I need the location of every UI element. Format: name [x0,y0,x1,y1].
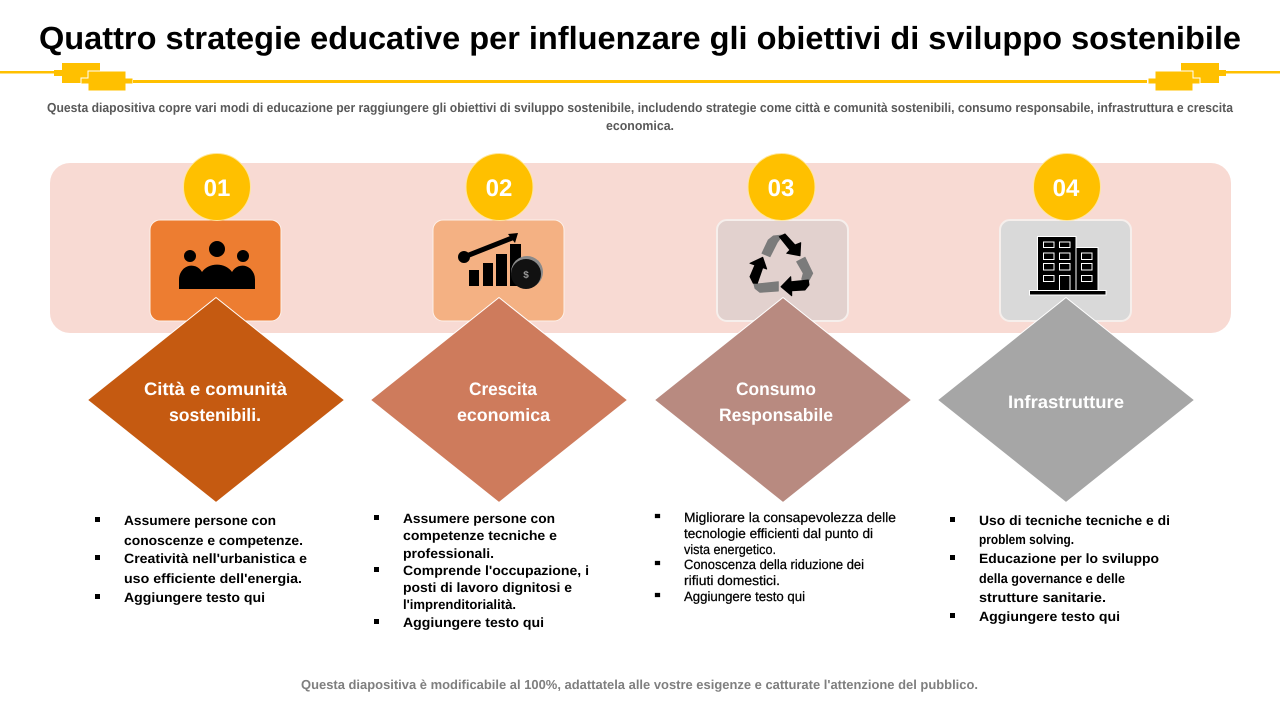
title underline connector [0,63,1280,91]
bullet list 01 [95,513,308,605]
icon box 03 [717,220,848,321]
bullet list 03: Migliorare la consapevolezza delle [684,510,896,525]
icon: growth chart and coin [458,233,543,289]
subtitle: Questa diapositiva copre vari modi di educazione per raggiungere gli obiettivi di sviluppo sostenibile, includendo strategie come città e comunità sostenibili, consumo responsabile, infrastruttura e crescita [47,100,1234,115]
bullet list 02 [374,511,589,630]
number badge 03: 03 [768,175,794,202]
number badge 04: 04 [1053,175,1080,202]
bullet list 02: professionali. [403,546,494,561]
icon box 04 [1000,220,1131,321]
diamond 03: Responsabile [719,405,833,425]
diamond 01 [88,298,344,502]
bullet list 04 [950,513,1170,624]
bullet list 02: l'imprenditorialità. [403,597,516,612]
bullet list 03 [655,510,896,604]
diamond 02: Crescita [469,379,538,399]
diamond 01: sostenibili. [169,405,261,425]
bullet list 04: Aggiungere testo qui [979,609,1120,624]
diamond 03: Consumo [736,379,816,399]
bullet list 04: Educazione per lo sviluppo [979,551,1159,566]
bullet list 04: della governance e delle [979,571,1125,586]
bullet list 02: Aggiungere testo qui [403,615,544,630]
subtitle [47,100,1234,133]
icon: people [179,241,255,289]
bullet list 04: strutture sanitarie. [979,590,1106,605]
subtitle: economica. [606,118,674,133]
number badge 01 [184,154,250,220]
footer note: Questa diapositiva è modificabile al 100%, adattatela alle vostre esigenze e catturate l'attenzione del pubblico. [301,677,978,692]
number badge 02: 02 [486,175,512,202]
bullet list 02: posti di lavoro dignitosi e [403,580,573,595]
number badge 03 [748,154,815,220]
panel: strategy 03 [654,154,912,604]
icon: recycle [750,234,813,296]
diamond 01: Città e comunità [144,379,288,399]
icon box 02 [433,220,564,321]
bullet list 03: tecnologie efficienti dal punto di [684,526,873,541]
bullet list 01: conoscenze e competenze. [124,533,303,548]
bullet list 02: competenze tecniche e [403,528,558,543]
background band [50,163,1231,333]
diamond 03 [654,298,912,502]
bullet list 04: Uso di tecniche tecniche e di [979,513,1170,528]
icon box 01 [150,220,281,321]
number badge 02 [466,154,533,220]
bullet list 02: Comprende l'occupazione, i [403,563,589,578]
bullet list 03: rifiuti domestici. [684,573,780,588]
bullet list 03: vista energetico. [684,542,776,557]
bullet list 03: Conoscenza della riduzione dei [684,557,864,572]
number badge 04 [1034,154,1100,220]
bullet list 01: Assumere persone con [124,513,276,528]
diamond 02 [370,298,628,502]
icon: building [1030,236,1106,295]
bullet list 01: uso efficiente dell'energia. [124,571,302,586]
panel: strategy 04 [938,154,1194,624]
panel: strategy 01 [88,154,344,605]
icon: growth chart and coin: $ [523,270,529,281]
title: Quattro strategie educative per influenzare gli obiettivi di sviluppo sostenibile [39,20,1241,56]
bullet list 03: Aggiungere testo qui [684,589,805,604]
bullet list 02: Assumere persone con [403,511,555,526]
diamond 04 [938,298,1194,502]
diamond 04: Infrastrutture [1008,392,1124,412]
number badge 01: 01 [204,175,230,202]
bullet list 01: Creatività nell'urbanistica e [124,551,308,566]
panel: strategy 02 [370,154,628,630]
bullet list 01: Aggiungere testo qui [124,590,265,605]
diamond 02: economica [457,405,551,425]
bullet list 04: problem solving. [979,532,1074,547]
